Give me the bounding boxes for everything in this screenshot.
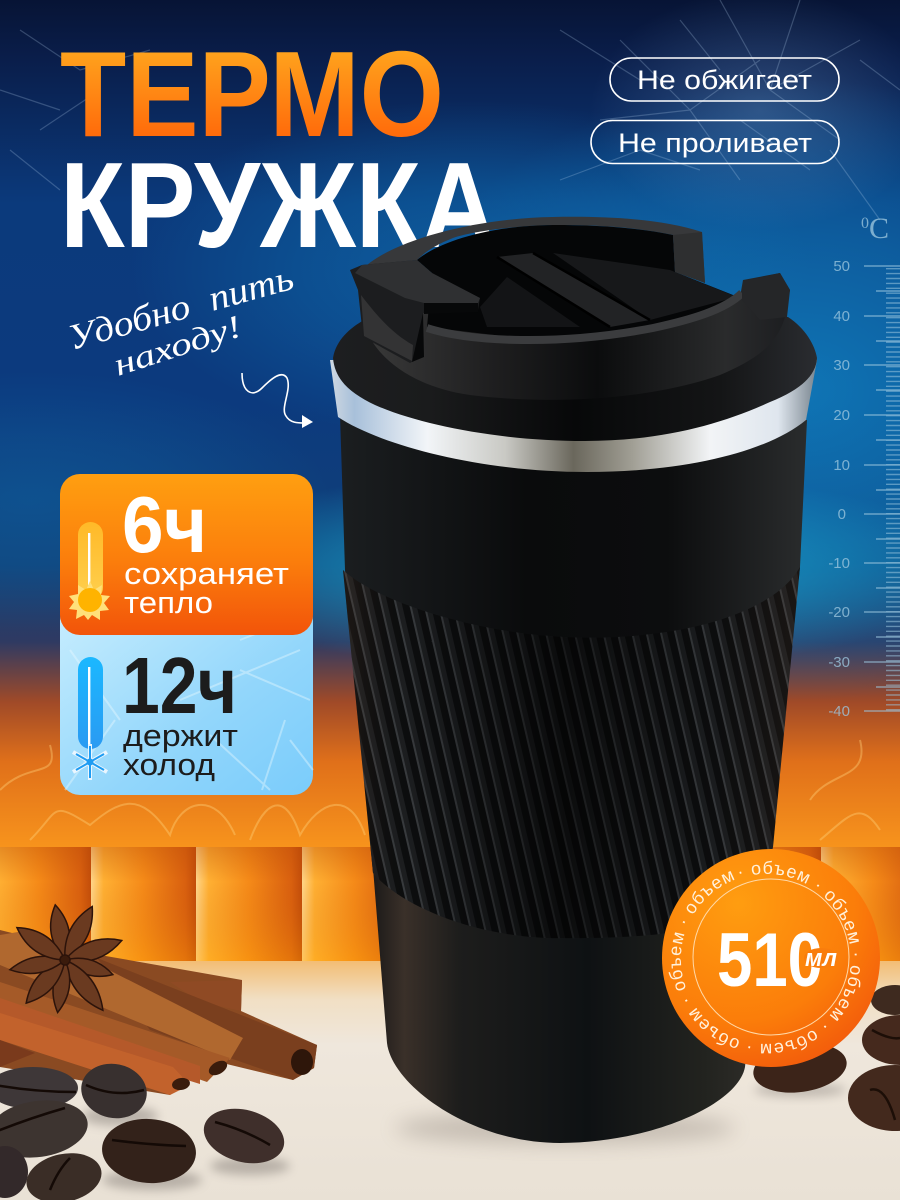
label: сохраняет тепло — [124, 556, 289, 620]
title: КРУЖКА: КРУЖКА — [60, 137, 497, 273]
panel: 6ч keeps heat — [60, 474, 313, 635]
pill: Не обжигает — [610, 58, 839, 101]
flames — [0, 740, 880, 840]
thermometer scale: 0 — [838, 506, 846, 523]
thermometer scale: -10 — [828, 555, 850, 572]
label: держит холод: держит — [123, 718, 238, 753]
lid tab — [350, 260, 480, 363]
thermometer scale: C — [869, 212, 889, 245]
background — [0, 0, 900, 850]
thermometer scale: 40 — [833, 308, 850, 325]
badge unit: мл: мл — [805, 945, 837, 972]
thermo mug — [330, 217, 820, 1144]
stat: 6ч: 6ч — [122, 480, 207, 569]
icon: hot thermometer — [69, 522, 110, 620]
wooden wall — [0, 847, 900, 962]
thermometer scale: 30 — [833, 357, 850, 374]
pill: Не обжигает: Не обжигает — [637, 65, 812, 95]
lid back rim — [367, 217, 705, 283]
cinnamon sticks — [0, 930, 317, 1095]
table — [0, 961, 900, 1200]
lid plates — [553, 253, 737, 320]
thermometer scale: -30 — [828, 654, 850, 671]
lid right post — [673, 232, 705, 283]
stat: 12ч: 12ч — [122, 641, 237, 730]
cinnamon and anise — [0, 902, 317, 1095]
pill: Не проливает — [591, 120, 839, 164]
handwritten slogan: Удобно пить — [63, 257, 298, 358]
title: ТЕРМО: ТЕРМО — [60, 26, 444, 162]
label: держит холод — [123, 718, 238, 782]
rib sleeve — [343, 567, 800, 938]
label: сохраняет тепло: тепло — [124, 585, 213, 620]
label: сохраняет тепло: сохраняет — [124, 556, 289, 591]
coffee beans right — [750, 985, 900, 1131]
badge: 510 мл — [662, 849, 880, 1067]
thermometer scale: -20 — [828, 604, 850, 621]
mug base — [373, 868, 763, 1143]
thermometer scale: -40 — [828, 703, 850, 720]
label: держит холод: холод — [123, 747, 215, 782]
thermometer scale: 10 — [833, 457, 850, 474]
lid front edge — [427, 293, 742, 340]
mug body — [340, 415, 807, 893]
handwritten slogan: находу! — [109, 308, 246, 383]
badge value: 510: 510 — [717, 918, 823, 1003]
lid — [333, 217, 817, 441]
lid recess — [417, 225, 738, 342]
thermometer scale: 0 — [861, 215, 869, 232]
arrow: squiggle to cup — [242, 373, 313, 428]
coffee beans left — [0, 1058, 290, 1200]
panels: temperature stats — [60, 474, 313, 795]
panel: 12ч keeps cold — [60, 600, 313, 795]
thermometer scale: 20 — [833, 407, 850, 424]
thermometer scale: 50 — [833, 258, 850, 275]
icon: star anise — [8, 902, 125, 1016]
steel rim — [330, 360, 817, 472]
thermometer scale — [828, 212, 900, 720]
pill: Не проливает: Не проливает — [618, 128, 812, 158]
handwritten slogan — [63, 257, 298, 383]
icon: cold thermometer — [73, 657, 107, 780]
badge ring text: · объем · объем · объем · объем · объем · объем · объем — [668, 860, 860, 1054]
